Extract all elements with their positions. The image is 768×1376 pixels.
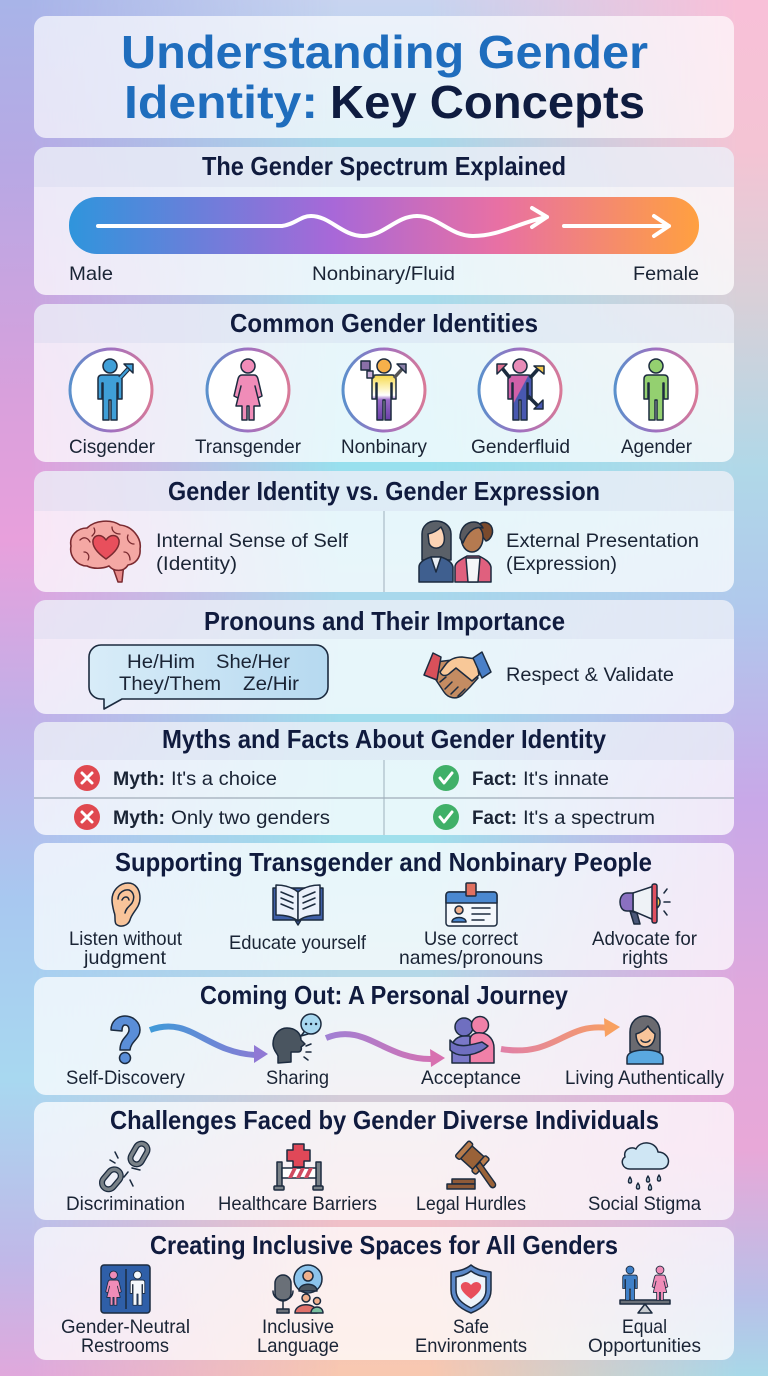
spectrum labels [69, 263, 699, 285]
icon: inclusive language [273, 1265, 323, 1313]
inclusive labels: Restrooms [81, 1335, 169, 1357]
journey labels: Sharing [266, 1067, 329, 1089]
icon: brain with heart [71, 521, 140, 582]
journey labels: Acceptance [421, 1067, 521, 1089]
heading: Challenges Faced by Gender Diverse Individuals [110, 1105, 659, 1135]
challenge labels: Discrimination [66, 1193, 185, 1215]
panel: inclusive spaces [34, 1227, 734, 1360]
spectrum labels: Female [633, 263, 699, 285]
supporting labels: Advocate for [592, 928, 697, 950]
heading: Supporting Transgender and Nonbinary People [115, 847, 652, 877]
supporting labels: rights [622, 947, 668, 969]
panel: supporting people [34, 843, 734, 970]
expression text [506, 530, 699, 575]
icon: ear [112, 883, 140, 926]
speech bubble with pronouns: She/Her [216, 651, 291, 673]
inclusive labels: Opportunities [588, 1335, 701, 1357]
journey labels [66, 1067, 724, 1089]
heading: Creating Inclusive Spaces for All Genders [150, 1230, 618, 1260]
heading: Common Gender Identities [230, 308, 538, 338]
identity text: (Identity) [156, 553, 237, 575]
challenge labels: Social Stigma [588, 1193, 701, 1215]
identity labels: Transgender [195, 436, 301, 458]
myth 1: Myth: [113, 768, 165, 790]
title line 1: Understanding Gender [121, 26, 648, 78]
myth 2: Myth: [113, 807, 165, 829]
speech bubble with pronouns: He/Him [127, 651, 195, 673]
title line 2 [124, 76, 645, 128]
heading: Myths and Facts About Gender Identity [162, 724, 606, 754]
fact 2 [433, 804, 655, 830]
icon: smiling woman [627, 1016, 663, 1064]
icon: open book [273, 885, 323, 925]
title line 2: Identity: [124, 76, 318, 128]
respect text: Respect & Validate [506, 664, 674, 686]
identity labels: Cisgender [69, 436, 155, 458]
title line 2: Key Concepts [330, 76, 645, 128]
speech bubble with pronouns [89, 645, 328, 709]
panel: common gender identities [34, 304, 734, 462]
icon: id card [446, 883, 497, 926]
challenge labels: Legal Hurdles [416, 1193, 526, 1215]
fact 2: It's a spectrum [523, 807, 655, 829]
journey labels: Living Authentically [565, 1067, 724, 1089]
myth 2 [74, 804, 330, 830]
inclusive labels: Language [257, 1335, 339, 1357]
heading: The Gender Spectrum Explained [202, 151, 566, 181]
journey labels: Self-Discovery [66, 1067, 185, 1089]
identity labels: Nonbinary [341, 436, 427, 458]
panel: coming out [34, 977, 734, 1095]
supporting labels: judgment [83, 947, 167, 969]
icon: agender [615, 349, 697, 431]
icon: question mark [111, 1016, 140, 1064]
spectrum bar [69, 197, 699, 254]
supporting labels [69, 928, 697, 969]
inclusive labels: Gender-Neutral [61, 1316, 190, 1338]
spectrum labels: Male [69, 263, 113, 285]
icon: healthcare barrier [274, 1144, 323, 1190]
fact 2: Fact: [472, 807, 517, 829]
identity labels [69, 436, 692, 458]
arrow: discovery to sharing [150, 1026, 268, 1063]
icon: gavel [447, 1140, 496, 1189]
panel: gender spectrum [34, 147, 734, 295]
icon: genderfluid [479, 349, 561, 431]
icon: broken chain [99, 1141, 150, 1192]
expression text: External Presentation [506, 530, 699, 552]
icon: nonbinary [343, 349, 425, 431]
supporting labels: names/pronouns [399, 947, 543, 969]
inclusive labels: Environments [415, 1335, 527, 1357]
supporting labels: Educate yourself [229, 932, 367, 954]
icon: transgender [207, 349, 289, 431]
panel: myths and facts [34, 722, 734, 835]
panel: challenges [34, 1102, 734, 1220]
myth 1: It's a choice [171, 768, 277, 790]
arrow: sharing to acceptance [326, 1034, 445, 1067]
challenge labels [66, 1193, 701, 1215]
expression text: (Expression) [506, 553, 617, 575]
inclusive labels [61, 1316, 701, 1357]
heading: Gender Identity vs. Gender Expression [168, 476, 600, 506]
panel: identity vs expression [34, 471, 734, 592]
fact 1: It's innate [523, 768, 609, 790]
icon: speaking head with bubble [273, 1014, 321, 1063]
icon: shield with heart [451, 1265, 491, 1313]
panel: pronouns [34, 600, 734, 714]
identity labels: Genderfluid [471, 436, 570, 458]
inclusive labels: Inclusive [262, 1316, 334, 1338]
fact 1: Fact: [472, 768, 517, 790]
fact 1 [433, 765, 609, 791]
icon: handshake [424, 652, 491, 698]
arrow: acceptance to living [501, 1018, 620, 1050]
panel: title [34, 16, 734, 138]
icon: hugging people [450, 1016, 494, 1063]
inclusive labels: Equal [622, 1316, 667, 1338]
identity text [156, 530, 349, 575]
spectrum labels: Nonbinary/Fluid [312, 263, 455, 285]
icon: megaphone [620, 884, 670, 924]
icon: two people [419, 521, 493, 582]
icon: cisgender [70, 349, 152, 431]
inclusive labels: Safe [453, 1316, 489, 1338]
challenge labels: Healthcare Barriers [218, 1193, 377, 1215]
identity labels: Agender [621, 436, 692, 458]
icon: restroom sign [101, 1265, 150, 1313]
icon: balance scale with two people [620, 1266, 670, 1313]
heading: Coming Out: A Personal Journey [200, 980, 568, 1010]
identity text: Internal Sense of Self [156, 530, 349, 552]
speech bubble with pronouns: Ze/Hir [243, 673, 300, 695]
myth 1 [74, 765, 277, 791]
myth 2: Only two genders [171, 807, 330, 829]
supporting labels: Use correct [424, 928, 519, 950]
supporting labels: Listen without [69, 928, 183, 950]
speech bubble with pronouns: They/Them [119, 673, 221, 695]
heading: Pronouns and Their Importance [204, 606, 565, 636]
icon: rain cloud [622, 1143, 668, 1190]
